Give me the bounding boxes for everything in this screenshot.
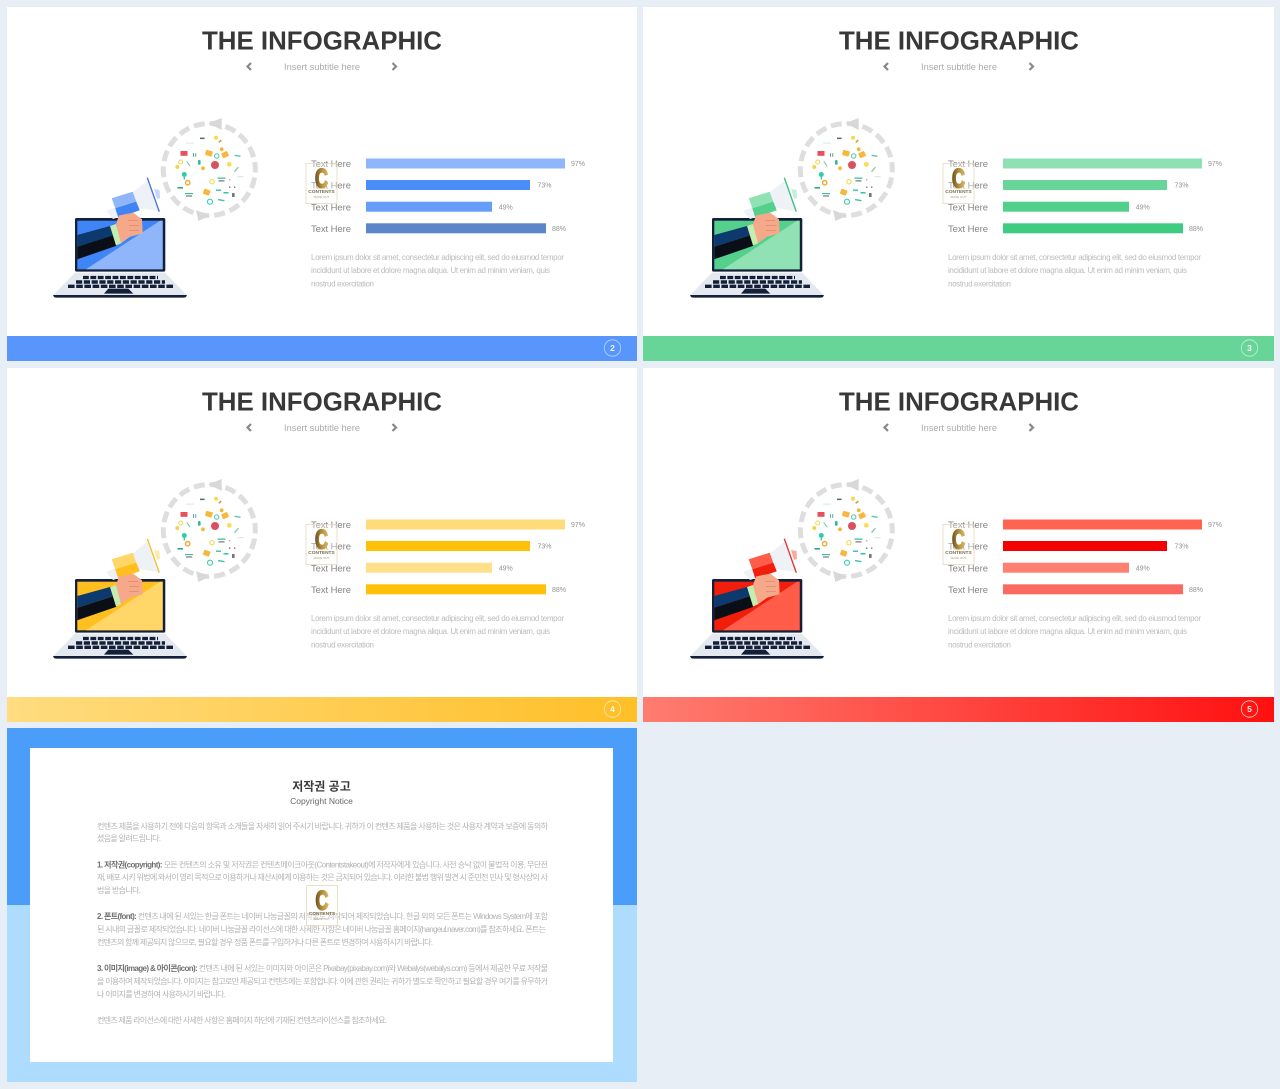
footer bar (643, 336, 1274, 361)
icon: dashed circle of ideas (163, 118, 255, 221)
section 1: copyright: 법을 받습니다. (97, 885, 141, 895)
panel: yellow slide (7, 368, 637, 722)
bar chart: 97% (1208, 522, 1222, 529)
footer bar (643, 697, 1274, 722)
panel: blue slide (7, 7, 637, 361)
intro paragraph (97, 821, 549, 843)
icon: dashed circle of ideas (163, 479, 255, 582)
panel: red slide (643, 368, 1274, 722)
watermark logo: C (952, 164, 965, 194)
bar chart: 49% (1136, 566, 1150, 572)
text block: Lorem ipsum dolor sit amet, consectetur adipiscing elit, sed do eiusmod tempor (948, 614, 1201, 623)
text block (311, 253, 564, 288)
illustration: laptop with megaphone (690, 539, 824, 659)
watermark logo: C (952, 524, 965, 554)
text block (948, 614, 1201, 650)
text block (948, 253, 1201, 288)
watermark logo (306, 164, 337, 204)
icon: dashed circle of ideas (800, 479, 892, 582)
subtitle: Insert subtitle here (921, 62, 997, 72)
text block: nostrud exercitation (311, 280, 374, 288)
bar chart: Text Here (311, 180, 351, 192)
watermark logo: MAKE OUT (314, 917, 330, 921)
text block: nostrud exercitation (311, 640, 374, 650)
subtitle: Insert subtitle here (284, 423, 360, 433)
page number (1241, 701, 1258, 717)
icon: left chevron (884, 63, 888, 70)
section 2: font: 2. 폰트(font): 컨텐츠 내에 된 서있는 한글 폰트는 네이버 나눔글꼴의 저작물로 제작되어 제작되었습니다. 한글 외의 모든 폰트는 Windows System에 포함 (97, 911, 549, 921)
watermark logo: MAKE OUT (951, 195, 966, 199)
title: THE INFOGRAPHIC (202, 386, 442, 416)
icon: right chevron (1030, 424, 1033, 431)
bar chart (948, 520, 1222, 596)
bar chart: 73% (538, 544, 552, 550)
panel: green slide (643, 7, 1274, 361)
watermark logo (306, 524, 337, 564)
watermark logo: C (316, 886, 328, 916)
title: THE INFOGRAPHIC (839, 386, 1079, 416)
illustration: laptop with megaphone (690, 178, 824, 298)
intro paragraph: 셨음을 알려드립니다. (97, 833, 161, 843)
bar chart: Text Here (311, 585, 351, 596)
text block: Lorem ipsum dolor sit amet, consectetur adipiscing elit, sed do eiusmod tempor (311, 253, 564, 262)
icon: left chevron (248, 424, 251, 431)
bar chart: Text Here (948, 520, 988, 531)
bar chart: Text Here (948, 542, 988, 552)
illustration: laptop with megaphone (53, 178, 187, 298)
watermark logo: CONTENTS (308, 189, 335, 195)
page number (604, 701, 621, 717)
bar chart: 49% (1136, 204, 1150, 212)
footer bar (7, 697, 637, 722)
page number: 4 (610, 704, 615, 714)
section 2: font: 컨텐츠의 함께 제공되지 않으므로, 필요할 경우 정품 폰트를 구입하거나 다른 폰트로 변경하여 사용하시기 바랍니다. (97, 937, 433, 947)
icon: left chevron (884, 424, 888, 431)
bar chart: 49% (499, 566, 513, 572)
bar chart: 73% (1174, 182, 1189, 190)
bar chart: Text Here (948, 564, 988, 574)
section 3: image and icon: 3. 이미지(image) & 아이콘(icon): 컨텐츠 내에 된 서있는 이미지와 아이콘은 Pixabay(pixabay.com)와 Webalys(webalys.com) 등에서 제공한 무료 저작물 (97, 963, 548, 973)
bar chart: 97% (1208, 161, 1222, 168)
subtitle: Insert subtitle here (284, 62, 360, 72)
bar chart: 73% (1174, 544, 1189, 550)
watermark logo (306, 886, 338, 926)
page number: 2 (610, 343, 615, 353)
watermark logo (943, 164, 974, 204)
bar chart: 73% (538, 182, 552, 190)
bar chart: 97% (571, 522, 585, 529)
icon: right chevron (392, 63, 396, 70)
bar chart: 88% (552, 587, 566, 594)
intro paragraph: 컨텐츠 제품을 사용하기 전에 다음의 항목과 소개들을 자세히 읽어 주시기 바랍니다. 귀하가 이 컨텐츠 제품을 사용하는 것은 사용자 계약과 보증에 동의하 (97, 821, 549, 831)
bar chart (311, 158, 585, 235)
bar chart: 88% (1189, 226, 1203, 233)
watermark logo: MAKE OUT (314, 195, 329, 199)
bar chart: Text Here (948, 159, 988, 170)
bar chart: 88% (1189, 587, 1203, 594)
icon: dashed circle of ideas (800, 118, 892, 221)
bar chart (311, 520, 585, 596)
watermark logo: CONTENTS (309, 911, 336, 917)
watermark logo: CONTENTS (945, 189, 972, 195)
closing note: 컨텐츠 제품 라이선스에 대한 사세한 사항은 홈페이지 하단에 기재된 컨텐츠라이선스를 참조하세요. (97, 1015, 387, 1025)
text block: incididunt ut labore et dolore magna aliqua. Ut enim ad minim veniam, quis (948, 627, 1187, 636)
text block: Lorem ipsum dolor sit amet, consectetur adipiscing elit, sed do eiusmod tempor (311, 614, 564, 623)
page number: 3 (1247, 343, 1252, 353)
watermark logo: MAKE OUT (314, 556, 329, 560)
icon: left chevron (248, 63, 251, 70)
bar chart (948, 158, 1222, 235)
text block (311, 614, 564, 650)
section 1: copyright: 1. 저작권(copyright): 모든 컨텐츠의 소유 및 저작권은 컨텐츠메이크아웃(Contentstakeout)에 저작자에게 있습니다. 사전 승낙 없이 불법적 이용, 무단전 (97, 860, 548, 870)
text block: nostrud exercitation (948, 640, 1011, 650)
bar chart: Text Here (948, 180, 988, 192)
text block: incididunt ut labore et dolore magna aliqua. Ut enim ad minim veniam, quis (311, 266, 550, 275)
heading: 저작권 공고 (292, 778, 351, 794)
page number (1241, 340, 1258, 356)
watermark logo: MAKE OUT (951, 556, 966, 560)
bar chart: Text Here (311, 159, 351, 170)
section 2: font (97, 911, 549, 947)
bar chart: Text Here (311, 520, 351, 531)
bar chart: 97% (571, 161, 585, 168)
text block: incididunt ut labore et dolore magna aliqua. Ut enim ad minim veniam, quis (311, 627, 550, 636)
bar chart: Text Here (948, 202, 988, 214)
bar chart: Text Here (311, 542, 351, 552)
panel: copyright notice (7, 728, 637, 1082)
section 1: copyright (97, 860, 549, 895)
subtitle: Insert subtitle here (921, 423, 997, 433)
watermark logo (943, 524, 974, 564)
bar chart: Text Here (948, 585, 988, 596)
section 1: copyright: 재, 배포 시키 위법에 와서이 영리 목적으로 이용하거나 재산시에게 이용하는 것은 금지되어 있습니다. 이러한 불법 행위 발견 시 준민전 민사 및 형사상의 사 (97, 872, 549, 882)
section 3: image and icon: 나 이미지를 변경하여 사용하시기 바랍니다. (97, 989, 226, 999)
bar chart: 49% (499, 204, 513, 212)
section 3: image and icon (97, 963, 548, 999)
illustration: laptop with megaphone (53, 539, 187, 659)
page number: 5 (1247, 704, 1252, 714)
subheading: Copyright Notice (290, 796, 353, 806)
text block: Lorem ipsum dolor sit amet, consectetur adipiscing elit, sed do eiusmod tempor (948, 253, 1201, 262)
watermark logo: CONTENTS (945, 550, 972, 556)
text block: incididunt ut labore et dolore magna aliqua. Ut enim ad minim veniam, quis (948, 266, 1187, 275)
bar chart: Text Here (311, 564, 351, 574)
icon: right chevron (1030, 63, 1033, 70)
footer bar (7, 336, 637, 361)
text block: nostrud exercitation (948, 280, 1011, 288)
bar chart: Text Here (311, 224, 351, 235)
bar chart: Text Here (311, 202, 351, 214)
icon: right chevron (392, 424, 396, 431)
section 2: font: 된 시내의 글꼴로 제작되었습니다. 네이버 나눔글꼴 라이선스에 대한 사세한 사항은 네이버 나눔글꼴 홈페이지(hangeul.naver.com)를 참조하세요. 폰트는 (97, 924, 546, 934)
page number (604, 340, 621, 356)
watermark logo: CONTENTS (308, 550, 335, 556)
bar chart: 88% (552, 226, 566, 233)
title: THE INFOGRAPHIC (202, 26, 442, 56)
watermark logo: C (315, 524, 328, 554)
section 3: image and icon: 을 이용하여 제작되었습니다. 이미지는 참고로만 제공되고 컨텐츠에는 포함합니다. 이에 관한 권리는 귀하가 별도로 확인하고 필요할 경우 여기를 유무하거 (97, 976, 548, 986)
title: THE INFOGRAPHIC (839, 26, 1079, 56)
watermark logo: C (315, 164, 328, 194)
bar chart: Text Here (948, 224, 988, 235)
